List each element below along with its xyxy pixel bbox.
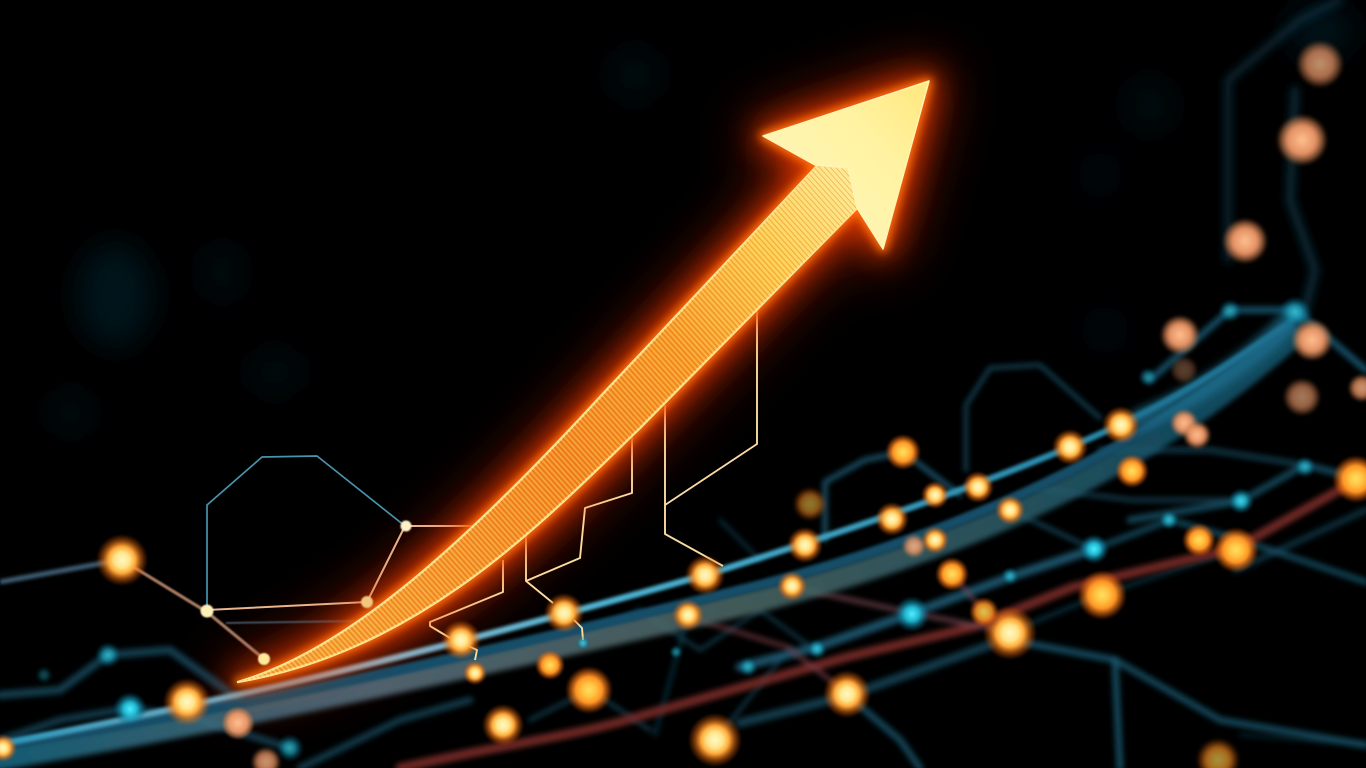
network: red strands xyxy=(400,475,1366,768)
small in-focus junction dots xyxy=(200,520,412,665)
arrow head xyxy=(763,81,929,249)
arrow inner glow xyxy=(238,81,929,682)
bright orange nodes xyxy=(0,406,1140,767)
arrow xyxy=(238,81,929,682)
circuit outline left: warm links xyxy=(122,526,475,659)
circuit outline left: blue polygon xyxy=(207,456,405,610)
blue nodes xyxy=(35,296,1316,762)
left grey-blue strand xyxy=(0,560,120,582)
soft out-of-focus nodes xyxy=(251,40,1366,768)
circuit traces under the arrow xyxy=(430,308,757,660)
background network: upper right out-of-focus lines xyxy=(1228,0,1340,330)
background haze: dim blue bokeh xyxy=(46,0,1354,436)
arrow outer red glow xyxy=(238,81,929,682)
network: far blue lines xyxy=(0,310,1366,768)
amber nodes xyxy=(535,434,1366,714)
network: main curved tube xyxy=(0,315,1295,758)
arrow shaft xyxy=(238,166,857,682)
